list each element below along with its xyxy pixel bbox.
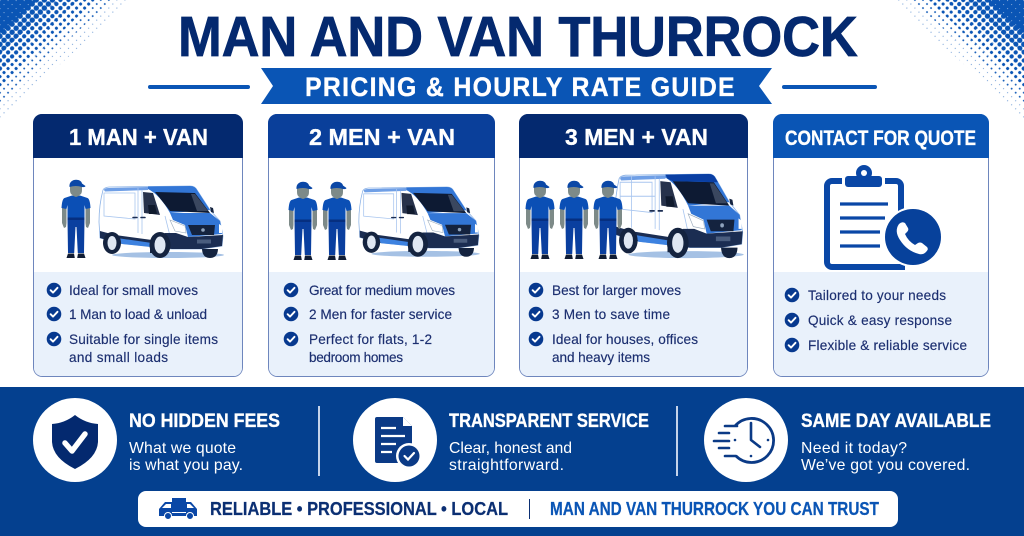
- feature list: 3 Men to save time: [552, 307, 670, 322]
- trust strip: [138, 491, 898, 527]
- feature list: Best for larger moves: [552, 283, 681, 298]
- subtitle ribbon: [261, 68, 772, 104]
- feature list: Tailored to your needs: [808, 288, 946, 303]
- footer band: [0, 387, 1024, 536]
- feature list: 1 Man to load & unload: [69, 307, 207, 322]
- icon: fast clock: [704, 398, 788, 482]
- feature list: [529, 283, 698, 365]
- slogan: RELIABLE • PROFESSIONAL • LOCAL: [210, 499, 508, 519]
- heading: CONTACT FOR QUOTE: [785, 126, 976, 150]
- icon: workers: [288, 182, 352, 260]
- heading: NO HIDDEN FEES: [129, 410, 280, 432]
- description: We’ve got you covered.: [801, 457, 970, 474]
- feature list: [284, 283, 455, 365]
- feature list: bedroom homes: [309, 350, 403, 365]
- icon: van: [99, 186, 224, 258]
- benefit: transparent service: [353, 398, 649, 482]
- description: What we quote: [129, 440, 236, 457]
- icon: workers: [526, 181, 622, 259]
- feature list: and heavy items: [552, 350, 650, 365]
- feature list: Ideal for small moves: [69, 283, 198, 298]
- description: is what you pay.: [129, 457, 243, 474]
- panel: 3 men + van: [519, 114, 748, 376]
- icon: worker: [62, 180, 90, 258]
- benefit: same day available: [704, 398, 991, 482]
- divider: [676, 406, 678, 476]
- icon: clipboard with phone: [827, 165, 943, 267]
- benefit: no hidden fees: [33, 398, 280, 482]
- icon: van: [615, 174, 744, 258]
- feature list: [785, 288, 967, 353]
- description: [449, 440, 572, 474]
- description: [801, 440, 970, 474]
- feature list: Flexible & reliable service: [808, 338, 967, 353]
- description: straightforward.: [449, 457, 564, 474]
- heading: 2 MEN + VAN: [309, 124, 455, 150]
- panel: 1 man + van: [33, 114, 243, 376]
- title: MAN AND VAN THURROCK: [178, 5, 858, 68]
- panel: 2 men + van: [268, 114, 495, 376]
- rule right: [782, 85, 877, 89]
- tagline: MAN AND VAN THURROCK YOU CAN TRUST: [550, 499, 879, 519]
- icon: document with check: [353, 398, 437, 482]
- feature list: Quick & easy response: [808, 313, 952, 328]
- heading: SAME DAY AVAILABLE: [801, 410, 991, 432]
- header: [33, 114, 243, 158]
- panel: contact for quote: [773, 114, 989, 376]
- heading: TRANSPARENT SERVICE: [449, 410, 649, 432]
- header: [519, 114, 748, 158]
- header: [773, 114, 989, 158]
- description: Need it today?: [801, 440, 907, 457]
- feature list: 2 Men for faster service: [309, 307, 452, 322]
- icon: van: [359, 187, 480, 257]
- subtitle ribbon: PRICING & HOURLY RATE GUIDE: [305, 73, 735, 102]
- feature list: Perfect for flats, 1-2: [309, 332, 432, 347]
- feature list: Great for medium moves: [309, 283, 455, 298]
- divider: [318, 406, 320, 476]
- halftone corner: top right: [892, 0, 1024, 118]
- feature list: Suitable for single items: [69, 332, 218, 347]
- strip divider: [529, 499, 530, 519]
- heading: 3 MEN + VAN: [565, 124, 708, 150]
- feature list: [47, 283, 218, 365]
- icon: truck: [159, 498, 197, 520]
- feature list: and small loads: [69, 350, 168, 365]
- halftone corner: top left: [0, 0, 132, 118]
- description: Clear, honest and: [449, 440, 572, 457]
- description: [129, 440, 243, 474]
- icon: shield: [33, 398, 117, 482]
- rule left: [148, 85, 250, 89]
- feature list: Ideal for houses, offices: [552, 332, 698, 347]
- header: [268, 114, 495, 158]
- heading: 1 MAN + VAN: [69, 124, 208, 150]
